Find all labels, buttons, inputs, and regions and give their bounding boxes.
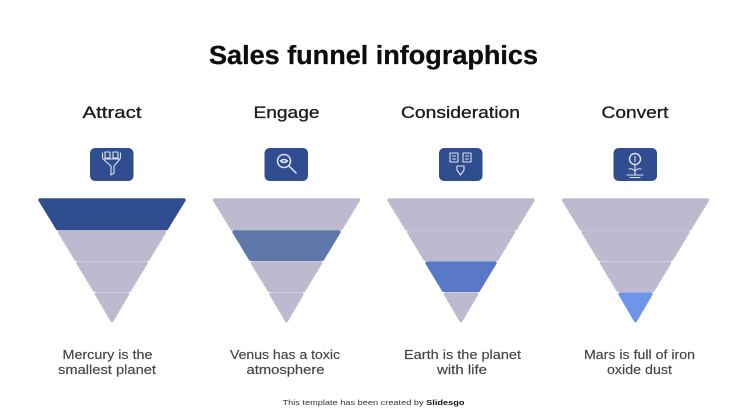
heading: Attract: Attract [82,104,142,122]
description: Engage [230,348,340,377]
funnel: Engage [214,200,358,320]
description: Attract [58,348,157,377]
description: Consideration: with life [436,363,487,377]
funnel: Consideration [389,200,533,320]
column: Convert [564,104,708,377]
description: Attract: smallest planet [58,363,157,377]
heading: Engage: Engage [254,104,320,122]
column: Attract [40,104,184,377]
footer credit: This template has been created by Slidesgo [282,398,465,407]
description: Convert [584,348,695,377]
heading: Convert: Convert [602,104,669,122]
description: Consideration: Earth is the planet [404,348,522,362]
description: Consideration [404,348,522,377]
description: Convert: oxide dust [607,363,673,377]
icon: magnifying glass [264,148,308,181]
funnel: Convert [564,200,708,320]
icon: funnel with books [90,148,134,181]
heading: Consideration: Consideration [401,104,520,122]
description: Engage: atmosphere [246,363,325,377]
funnel: Attract [40,200,184,320]
description: Convert: Mars is full of iron [584,348,695,362]
icon: coin plant [614,148,657,181]
column: Engage [214,104,358,377]
description: Engage: Venus has a toxic [230,348,340,362]
column: Consideration [389,104,533,377]
title: Sales funnel infographics [209,42,538,70]
icon: two boards and pin [439,148,482,181]
description: Attract: Mercury is the [62,348,153,362]
